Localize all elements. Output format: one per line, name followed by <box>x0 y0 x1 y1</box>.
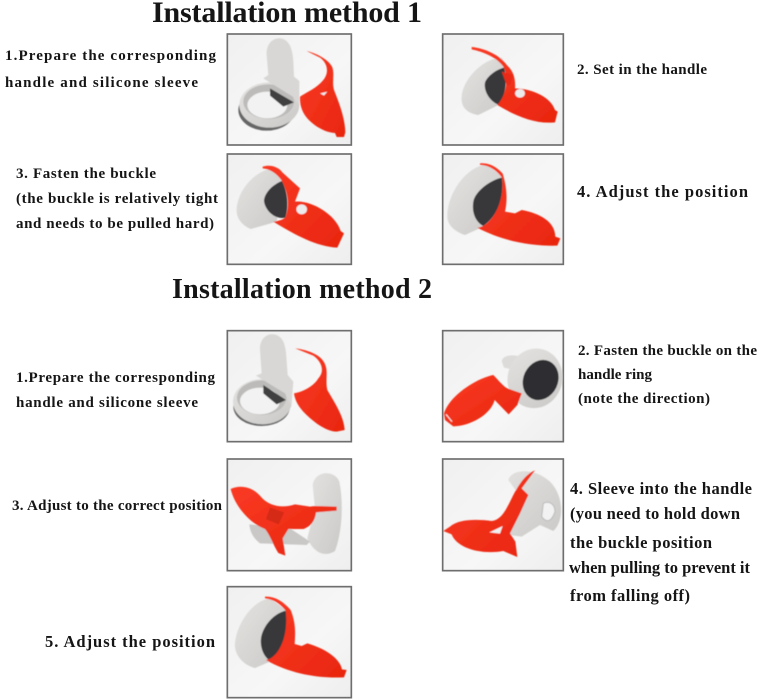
step text: method 1 step 2: 2. Set in the handle <box>577 62 707 78</box>
step text: method 2 step 4 <box>569 479 752 605</box>
step text: method 2 step 2 <box>578 343 757 407</box>
step text: method 1 step 3: 3. Fasten the buckle <box>16 166 156 182</box>
photo: method 2 step 5 <box>227 587 351 698</box>
step text: method 2 step 3: 3. Adjust to the correct position <box>12 498 223 514</box>
step text: method 2 step 4: the buckle position <box>570 533 712 552</box>
photo: method 2 step 3 <box>227 459 351 571</box>
step text: method 2 step 5: 5. Adjust the position <box>45 632 215 651</box>
step text: method 2 step 4: 4. Sleeve into the handle <box>570 479 752 498</box>
step text: method 1 step 3: and needs to be pulled hard) <box>16 216 214 232</box>
step text: method 2 step 1: handle and silicone sleeve <box>16 395 198 411</box>
photo: method 1 step 2 <box>443 34 563 145</box>
step text: method 1 step 4: 4. Adjust the position <box>577 182 748 201</box>
step text: method 2 step 1: 1.Prepare the corresponding <box>16 370 216 386</box>
step text: method 1 step 1 <box>5 48 216 91</box>
photo: method 1 step 1 <box>227 34 351 145</box>
step text: method 2 step 2: handle ring <box>578 367 652 383</box>
step text: method 2 step 4: from falling off) <box>570 586 690 605</box>
step text: method 1 step 3: (the buckle is relatively tight <box>16 191 218 207</box>
photo: method 2 step 2 <box>443 331 569 442</box>
step text: method 2 step 2: (note the direction) <box>578 391 710 407</box>
step text: method 2 step 1 <box>16 370 216 411</box>
step text: method 1 step 1: handle and silicone sleeve <box>5 75 198 91</box>
photo: method 2 step 4 <box>443 459 563 571</box>
title: installation method 2: Installation method 2 <box>172 274 432 305</box>
step text: method 2 step 4: when pulling to prevent it <box>569 558 750 577</box>
step text: method 2 step 2: 2. Fasten the buckle on the <box>578 343 757 359</box>
photo: method 1 step 3 <box>227 154 351 264</box>
photo: method 2 step 1 <box>227 331 351 442</box>
step text: method 2 step 4: (you need to hold down <box>570 504 740 523</box>
photo: method 1 step 4 <box>443 154 563 264</box>
step text: method 1 step 3 <box>16 166 218 232</box>
step text: method 1 step 1: 1.Prepare the corresponding <box>5 48 216 64</box>
